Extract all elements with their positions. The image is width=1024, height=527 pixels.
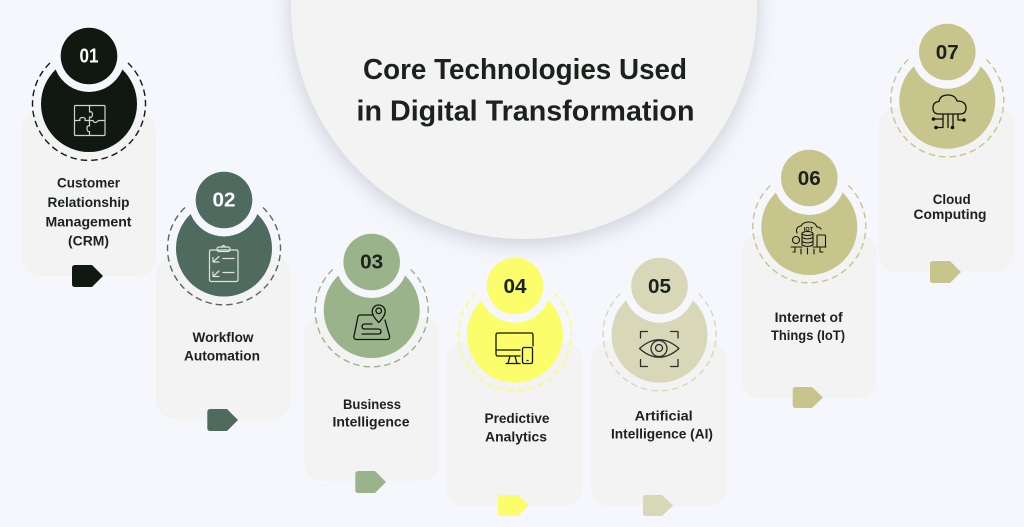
- dashed ring: [33, 63, 146, 160]
- arrow tag: [930, 261, 961, 283]
- icon: eye scan: [640, 332, 679, 366]
- arrow tag: [72, 265, 103, 287]
- card: [156, 257, 291, 419]
- label: Intelligence: [332, 414, 410, 430]
- card: [304, 317, 439, 481]
- label: (CRM): [68, 234, 109, 248]
- icon: clipboard: [210, 246, 238, 282]
- icon: IoT cloud and database: [791, 222, 826, 254]
- dashed ring: [603, 294, 716, 391]
- title: Core Technologies Used: [363, 54, 687, 86]
- label: Things (IoT): [771, 328, 845, 343]
- panel: item 07 Cloud Computing: [879, 24, 1014, 283]
- large circle cut by number gap: [324, 276, 420, 358]
- card: [741, 235, 876, 398]
- arrow tag: [355, 471, 386, 493]
- large circle cut by number gap: [41, 70, 137, 152]
- icon: puzzle: [74, 106, 105, 136]
- label: [332, 397, 410, 430]
- icon: monitor and phone: [496, 333, 533, 364]
- card: [446, 342, 582, 506]
- large circle cut by number gap: [467, 300, 563, 383]
- icon: map route with pin: [354, 305, 390, 340]
- dashed ring: [753, 186, 866, 283]
- panel: item 05 Artificial Intelligence: [591, 258, 727, 516]
- label: Management: [46, 214, 132, 230]
- label: Intelligence (AI): [611, 426, 713, 442]
- number badge: [781, 150, 838, 206]
- number: 02: [212, 190, 236, 212]
- arrow tag: [207, 409, 238, 431]
- panel: item 01 CRM: [21, 28, 156, 287]
- card: [879, 107, 1014, 272]
- arrow tag: [643, 495, 673, 516]
- number badge: [343, 234, 400, 290]
- label: [46, 176, 132, 248]
- card: [591, 342, 727, 506]
- number: 05: [648, 276, 671, 298]
- label: Cloud: [933, 192, 971, 207]
- number: 06: [798, 168, 821, 190]
- icon: cloud circuit: [932, 95, 966, 129]
- large circle cut by number gap: [761, 192, 857, 275]
- large circle cut by number gap: [612, 300, 708, 383]
- label: Predictive: [484, 411, 550, 426]
- panel: item 03 Business Intelligence: [304, 234, 439, 493]
- dashed ring: [891, 60, 1004, 157]
- label: [184, 330, 260, 364]
- arrow tag: [498, 495, 529, 516]
- large circle cut by number gap: [899, 66, 995, 149]
- panel: item 06 Internet of Things: [741, 150, 876, 408]
- panel: item 04 Predictive Analytics: [446, 258, 582, 516]
- label: [484, 411, 550, 444]
- title: in Digital Transformation: [356, 96, 694, 128]
- dashed ring: [315, 270, 428, 367]
- label: Business: [343, 397, 401, 412]
- arrow tag: [793, 387, 823, 408]
- label: Internet of: [775, 310, 843, 325]
- number badge: [919, 24, 976, 80]
- number badge: [196, 172, 252, 228]
- number: 03: [360, 252, 383, 274]
- number: 01: [80, 46, 98, 68]
- label: [914, 192, 986, 222]
- number badge: [61, 28, 117, 84]
- label: [771, 310, 845, 343]
- card: [21, 113, 156, 276]
- number badge: [631, 258, 688, 314]
- title: [356, 54, 694, 128]
- panel: item 02 Workflow Automation: [156, 172, 291, 431]
- dashed ring: [458, 294, 571, 391]
- number badge: [487, 258, 543, 314]
- label: Workflow: [192, 330, 254, 345]
- number: 07: [936, 42, 959, 64]
- label: Relationship: [48, 195, 130, 210]
- panel: title circle: [291, 0, 757, 239]
- label: Artificial: [635, 408, 693, 424]
- number: 04: [504, 276, 527, 298]
- large circle cut by number gap: [176, 214, 272, 297]
- label: Analytics: [485, 430, 547, 444]
- label: [611, 408, 713, 442]
- label: Customer: [57, 176, 121, 190]
- icon: IoT cloud and database: IOT: [804, 227, 814, 233]
- label: Automation: [184, 348, 260, 364]
- label: Computing: [914, 207, 986, 222]
- dashed ring: [168, 208, 280, 305]
